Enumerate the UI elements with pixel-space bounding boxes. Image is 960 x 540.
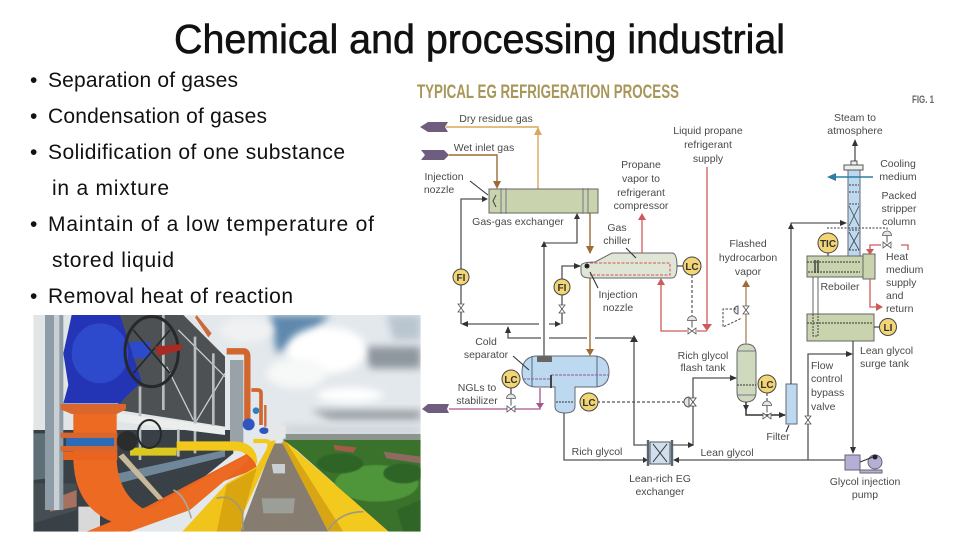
packed stripper column: stripper bbox=[881, 203, 917, 215]
bullet: condensation: Condensation of gases bbox=[48, 105, 267, 128]
stream: NGLs to stabilizer: stabilizer bbox=[456, 395, 498, 407]
reboiler: Reboiler bbox=[820, 281, 860, 293]
bullet: solidification: • bbox=[30, 141, 37, 164]
instrument TIC and control valve bbox=[818, 228, 892, 271]
flow control bypass valve: Flow bbox=[811, 360, 834, 372]
instrument LC on separator: LC bbox=[504, 375, 518, 386]
cooling medium arrow bbox=[827, 158, 917, 183]
heat medium supply and return: supply bbox=[886, 277, 917, 289]
heat medium supply and return: and bbox=[886, 290, 904, 302]
instrument FI left: FI bbox=[457, 273, 466, 284]
instrument LC on flash tank and filter line: LC bbox=[760, 380, 774, 391]
propane vapor arrow: vapor to bbox=[622, 173, 660, 185]
lean glycol surge tank: surge tank bbox=[860, 358, 910, 370]
stream: NGLs to stabilizer bbox=[422, 382, 544, 413]
packed stripper column: Steam to bbox=[834, 112, 876, 124]
trees and town bbox=[283, 434, 423, 532]
liquid propane supply bbox=[673, 125, 743, 334]
bullet: heat of reaction: • bbox=[30, 285, 37, 308]
rich glycol line bbox=[564, 413, 648, 463]
filter: Filter bbox=[766, 431, 790, 443]
title: Chemical and processing industrial bbox=[174, 16, 785, 62]
gas chiller: chiller bbox=[603, 235, 631, 247]
liquid propane supply: Liquid propane bbox=[673, 125, 743, 137]
figure number: FIG. 1 bbox=[912, 94, 934, 106]
instrument LC on separator bbox=[502, 370, 520, 395]
flashed hydrocarbon vapor: hydrocarbon bbox=[719, 252, 777, 264]
flashed hydrocarbon vapor bbox=[719, 238, 777, 344]
glycol injection pump: Glycol injection bbox=[830, 476, 900, 488]
lean glycol surge tank: LI bbox=[884, 323, 893, 334]
flashed hydrocarbon vapor: vapor bbox=[735, 266, 762, 278]
instrument LC at chiller: LC bbox=[685, 262, 699, 273]
instrument TIC and control valve: TIC bbox=[820, 239, 836, 250]
gas chiller: Gas bbox=[607, 222, 627, 234]
gas chiller: nozzle bbox=[603, 302, 633, 314]
big orange elbow bbox=[73, 414, 143, 522]
rich glycol flash tank: Rich glycol bbox=[678, 350, 728, 362]
diagram heading: TYPICAL EG REFRIGERATION PROCESS bbox=[417, 82, 679, 103]
flashed hydrocarbon vapor: Flashed bbox=[729, 238, 767, 250]
instrument LC on boot: LC bbox=[582, 398, 596, 409]
diagram: typical EG refrigeration process bbox=[417, 82, 934, 501]
cooling medium arrow: medium bbox=[879, 171, 917, 183]
heat medium supply and return: return bbox=[886, 303, 914, 315]
lean glycol line bbox=[672, 375, 845, 463]
lean glycol line: Lean glycol bbox=[700, 447, 754, 459]
gas chiller bbox=[581, 222, 684, 314]
flow control bypass valve: bypass bbox=[811, 387, 844, 399]
bullet: condensation: • bbox=[30, 105, 37, 128]
stream: NGLs to stabilizer: NGLs to bbox=[458, 382, 496, 394]
lean glycol surge tank: Lean glycol bbox=[860, 345, 913, 357]
filter bbox=[766, 384, 797, 443]
gas chiller: Injection bbox=[598, 289, 638, 301]
heat medium supply and return: medium bbox=[886, 264, 924, 276]
blue gate valve bbox=[63, 315, 142, 403]
instrument FI right: FI bbox=[558, 283, 567, 294]
stream: dry residue gas bbox=[420, 113, 542, 189]
stream: wet inlet gas: Wet inlet gas bbox=[454, 142, 514, 154]
packed stripper column: Packed bbox=[881, 190, 917, 202]
refrigerant return bbox=[657, 278, 687, 331]
liquid propane supply: supply bbox=[693, 153, 724, 165]
label: injection nozzle: Injection bbox=[424, 171, 464, 183]
glycol distribution lines bbox=[461, 213, 648, 445]
rich glycol flash tank: flash tank bbox=[681, 362, 726, 374]
handwheels bbox=[125, 317, 178, 448]
bullet: solidification: Solidification of one substance bbox=[48, 141, 345, 164]
glycol injection pump bbox=[830, 341, 900, 501]
walkway floor bbox=[240, 443, 328, 532]
bullet: low temperature: • bbox=[30, 213, 37, 236]
bullet: separation: Separation of gases bbox=[48, 69, 238, 92]
label: injection nozzle: nozzle bbox=[424, 184, 454, 196]
instrument LC at chiller bbox=[683, 257, 701, 316]
bullet: heat of reaction: Removal heat of reaction bbox=[48, 285, 293, 308]
glycol injection pump: pump bbox=[852, 489, 878, 501]
cooling tower panels bbox=[33, 315, 243, 532]
liquid propane supply: refrigerant bbox=[684, 139, 732, 151]
flow control bypass valve bbox=[805, 351, 853, 460]
instrument LC on boot bbox=[580, 393, 696, 411]
rich glycol line: Rich glycol bbox=[572, 446, 622, 458]
feed line to stripper bbox=[788, 220, 847, 384]
packed stripper column bbox=[827, 112, 917, 277]
packed stripper column: column bbox=[882, 216, 916, 228]
stream: wet inlet gas bbox=[421, 142, 514, 189]
bullet list bbox=[30, 69, 374, 308]
bullet: low temperature: Maintain of a low temperature of bbox=[48, 213, 374, 236]
propane vapor arrow bbox=[614, 159, 669, 253]
small far building bbox=[268, 426, 286, 439]
cold separator bbox=[464, 336, 609, 413]
instrument LC on flash tank and filter line bbox=[743, 375, 786, 419]
cooling medium arrow: Cooling bbox=[880, 158, 916, 170]
bullet continuation: stored liquid bbox=[52, 249, 174, 272]
cold separator: separator bbox=[464, 349, 509, 361]
packed stripper column: atmosphere bbox=[827, 125, 883, 137]
cold separator: Cold bbox=[475, 336, 497, 348]
lean glycol surge tank bbox=[807, 314, 913, 370]
lean-rich EG exchanger: exchanger bbox=[635, 486, 685, 498]
flow control bypass valve: control bbox=[811, 373, 843, 385]
photo: industrial pipes on a rooftop bbox=[33, 315, 423, 532]
propane vapor arrow: Propane bbox=[621, 159, 661, 171]
brown line to chiller and separator bbox=[586, 213, 594, 356]
lean-rich EG exchanger: Lean-rich EG bbox=[629, 473, 691, 485]
reboiler bbox=[807, 254, 875, 315]
heat medium supply and return bbox=[866, 245, 924, 315]
rich glycol flash tank bbox=[678, 344, 756, 402]
heat medium supply and return: Heat bbox=[886, 251, 908, 263]
gas-gas exchanger: Gas-gas exchanger bbox=[472, 216, 564, 228]
flow control bypass valve: valve bbox=[811, 401, 836, 413]
far orange risers bbox=[227, 351, 265, 427]
instrument FI left bbox=[453, 196, 488, 324]
instrument FI right bbox=[554, 263, 581, 324]
bullet: separation: • bbox=[30, 69, 37, 92]
label: injection nozzle bbox=[424, 171, 488, 196]
yellow pipes bbox=[130, 441, 269, 463]
bullet continuation: in a mixture bbox=[52, 177, 169, 200]
lean-rich EG exchanger bbox=[629, 440, 691, 498]
stream: dry residue gas: Dry residue gas bbox=[459, 113, 533, 125]
propane vapor arrow: compressor bbox=[614, 200, 669, 212]
gas-gas exchanger bbox=[472, 188, 598, 228]
propane vapor arrow: refrigerant bbox=[617, 187, 665, 199]
